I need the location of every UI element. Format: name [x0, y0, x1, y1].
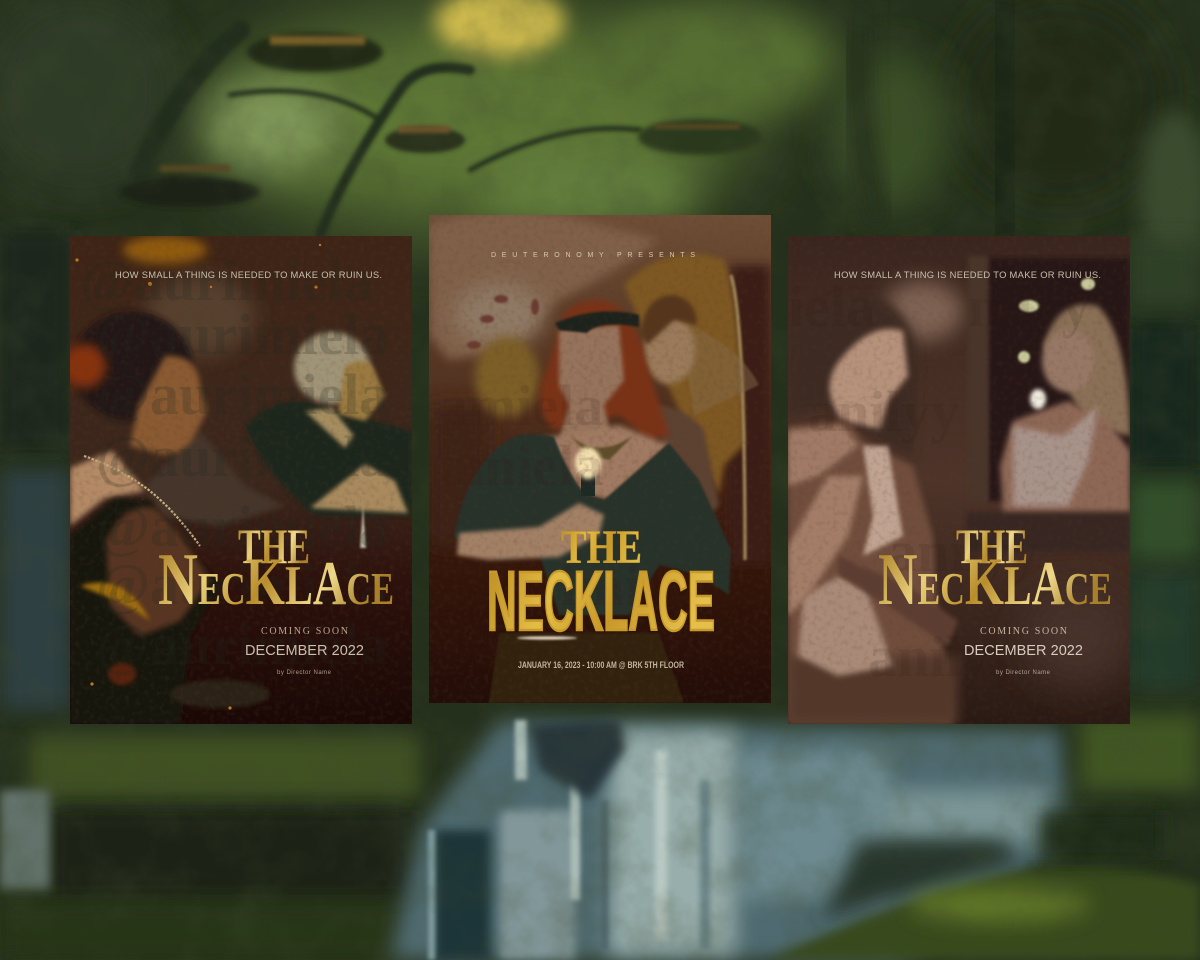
poster: right, How small a thing [788, 236, 1133, 724]
watermark: @aurimiela [96, 552, 388, 617]
woman's hair [72, 311, 192, 421]
nails [467, 295, 539, 349]
watermark: nilyy [968, 274, 1090, 339]
watermark: amiela [439, 433, 603, 498]
credit: by Director Name [996, 670, 1051, 676]
dark sides [429, 405, 489, 545]
flame [575, 447, 601, 479]
watermark: @aurimiela [96, 302, 388, 367]
old woman's robe [245, 332, 412, 516]
gold dust [475, 337, 539, 417]
watermark: @aurimiela [96, 362, 388, 427]
watermark: @aurimiela [419, 613, 711, 678]
candle [581, 470, 595, 496]
coming soon: COMING SOON [980, 626, 1067, 637]
tree trunks and branches [140, 30, 640, 235]
title: THE [238, 518, 310, 574]
credit: by Director Name [277, 670, 332, 676]
watermark: @aurimiela [80, 248, 372, 313]
watermark: anilyy [808, 379, 960, 444]
date: DECEMBER 2022 [964, 643, 1083, 659]
headdress [555, 311, 639, 333]
gold arch and fan [624, 254, 744, 495]
watermark [99, 272, 388, 675]
woman's face and neck [130, 356, 207, 454]
poster: center, Deuteronomy presents [419, 212, 771, 703]
red hair [539, 300, 669, 440]
poster: left, How small a thing [62, 236, 412, 724]
mirror frame [988, 258, 1130, 501]
glow and butterflies [1018, 278, 1095, 409]
skirt [489, 633, 684, 703]
watermark: @aurimiela [96, 424, 388, 489]
amber glow top [123, 236, 207, 264]
title: NECKLACE [878, 539, 1112, 621]
castle ruin [145, 431, 285, 526]
watermark [486, 384, 602, 485]
glint [517, 636, 577, 640]
watermark: anilyy [888, 519, 1040, 584]
lace [863, 446, 903, 556]
watermark: @aurimiela [96, 612, 388, 677]
tree houses [120, 32, 762, 207]
left woman hair [788, 295, 918, 456]
arm [457, 503, 604, 560]
second woman [641, 295, 719, 515]
pearl necklace [84, 456, 200, 546]
title: THE [956, 518, 1028, 574]
hands and arms [788, 476, 863, 616]
presenter line: DEUTERONOMY PRESENTS [491, 252, 699, 259]
embers [75, 244, 321, 710]
watermark [788, 274, 1090, 689]
tagline: HOW SMALL A THING IS NEEDED TO MAKE OR RUIN US. [115, 269, 383, 280]
golden streak [80, 583, 150, 621]
green chain dress [454, 434, 731, 615]
title: NECKLACE [158, 539, 394, 621]
left woman face [830, 329, 908, 429]
smoke [145, 276, 255, 356]
smoke [883, 281, 963, 341]
watermark: @aurimiela [96, 494, 388, 559]
candle flare [360, 504, 366, 548]
face and neck [559, 325, 624, 440]
necklace [569, 435, 634, 460]
watermark: amiela [439, 373, 603, 438]
title [489, 531, 714, 632]
woman's dress and arm [70, 498, 220, 724]
watermark: @aurimiela [419, 553, 711, 618]
hand background [429, 212, 659, 360]
watermark: iela [788, 274, 875, 339]
poster: center, Deuteronomy presents: NECKLACE [487, 554, 715, 648]
date: DECEMBER 2022 [245, 643, 364, 659]
event details: JANUARY 16, 2023 - 10:00 AM @ BRK 5TH FLOOR [518, 660, 684, 671]
coming soon: COMING SOON [261, 626, 348, 637]
tagline: HOW SMALL A THING IS NEEDED TO MAKE OR RUIN US. [834, 269, 1102, 280]
left woman body [788, 421, 953, 724]
reflection woman [1000, 304, 1130, 511]
title: THE [561, 521, 642, 574]
title [159, 530, 392, 604]
waterfall [390, 720, 1070, 960]
watermark: anilyy [868, 624, 1020, 689]
